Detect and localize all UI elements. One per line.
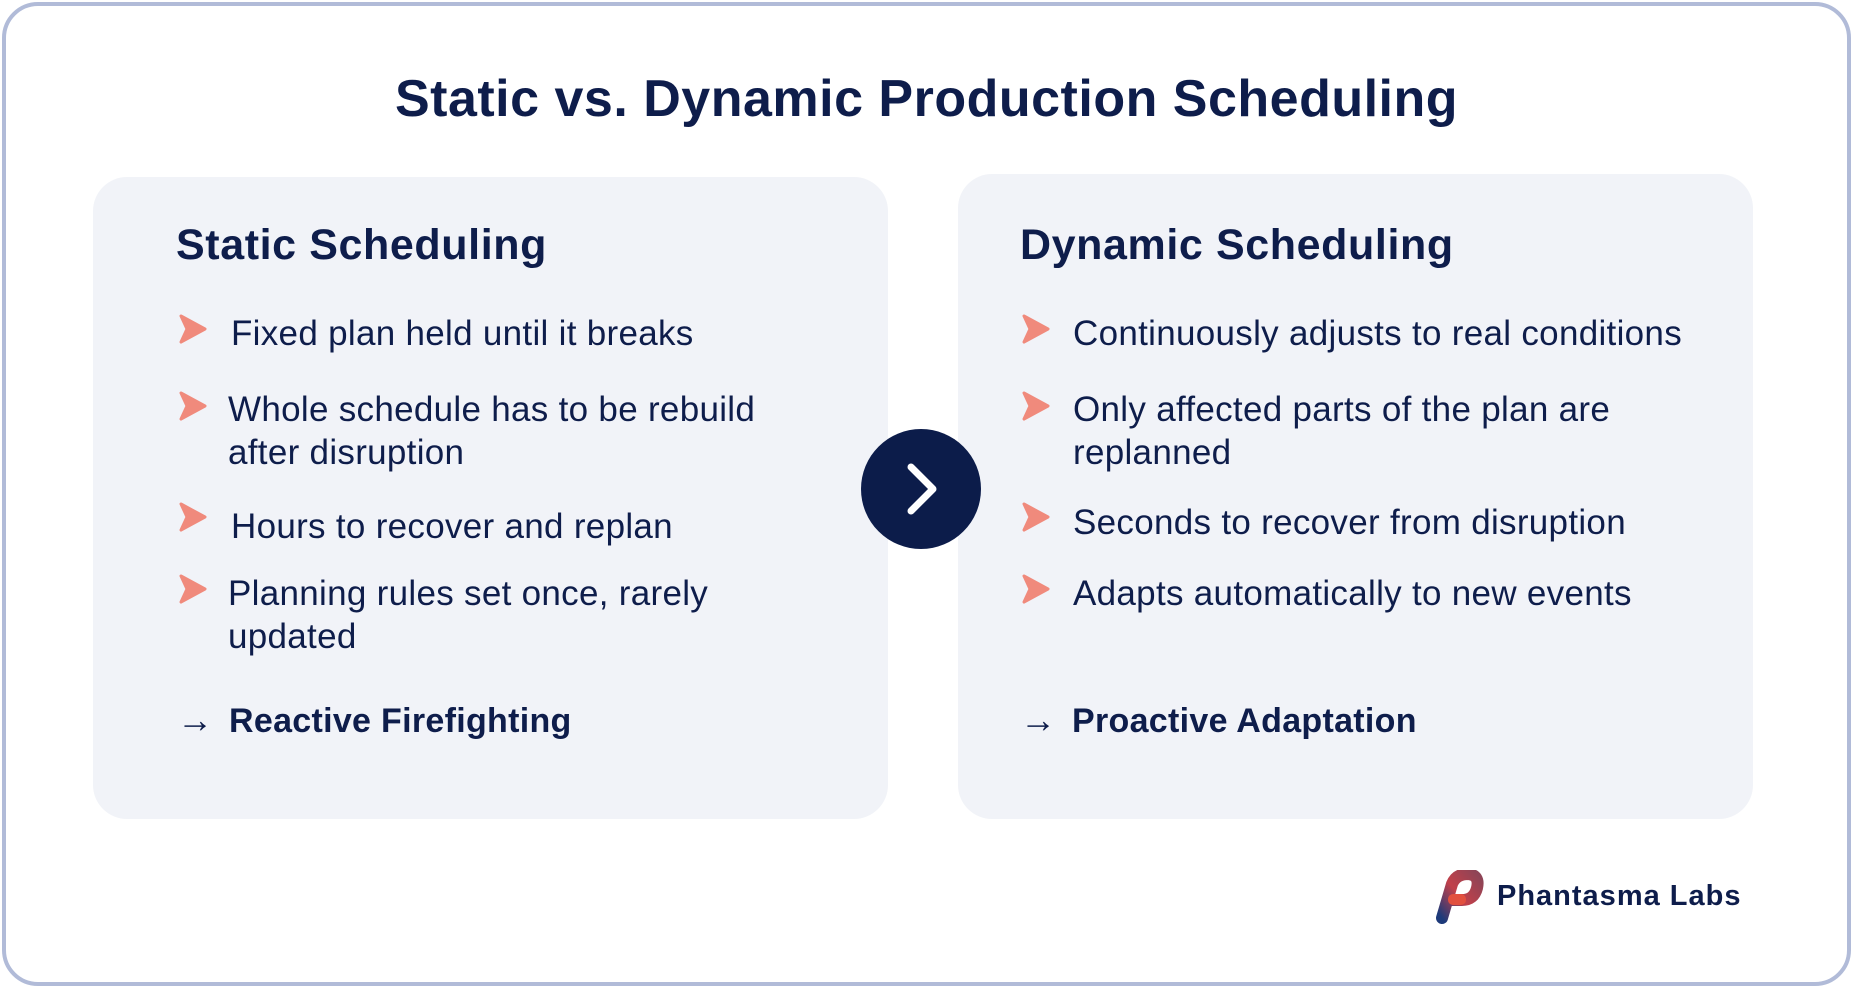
bullet icon 3 <box>180 502 206 532</box>
conclusion: proactive: Proactive Adaptation <box>1072 702 1417 740</box>
bullet icon 1 <box>1022 314 1050 344</box>
item 2: after disruption <box>228 433 464 472</box>
heading: static: Static Scheduling <box>176 221 547 269</box>
item 4 <box>228 574 708 656</box>
item 4: updated <box>228 617 357 656</box>
item 3: Hours to recover and replan <box>231 507 673 546</box>
item 3: Seconds to recover from disruption <box>1073 503 1626 542</box>
item 1: Fixed plan held until it breaks <box>231 314 694 353</box>
bullet icon 1 <box>180 314 206 344</box>
heading: dynamic: Dynamic Scheduling <box>1020 221 1454 269</box>
item 4: Planning rules set once, rarely <box>228 574 708 613</box>
item 2 <box>228 390 755 472</box>
item 1: Continuously adjusts to real conditions <box>1073 314 1682 353</box>
item 2 <box>1073 390 1610 472</box>
item 2: replanned <box>1073 433 1231 472</box>
panel: dynamic scheduling <box>958 174 1753 819</box>
item 4: Adapts automatically to new events <box>1073 574 1632 613</box>
bullet icon 4 <box>1022 574 1050 604</box>
panel: static scheduling <box>93 177 888 819</box>
item 2: Only affected parts of the plan are <box>1073 390 1610 429</box>
bullet icon 3 <box>1022 502 1050 532</box>
icon: center arrow circle <box>861 429 981 549</box>
conclusion: reactive: Reactive Firefighting <box>229 702 572 740</box>
logo: Phantasma Labs <box>1436 870 1741 924</box>
title: Static vs. Dynamic Production Scheduling <box>395 70 1458 128</box>
conclusion: reactive: → <box>177 699 213 740</box>
icon: logo mark <box>1436 870 1484 924</box>
item 2: Whole schedule has to be rebuild <box>228 390 755 429</box>
bullet icon 4 <box>180 574 206 604</box>
bullet icon 2 <box>180 392 206 421</box>
bullet icon 2 <box>1022 392 1050 421</box>
conclusion: proactive: → <box>1020 699 1056 740</box>
logo text: Phantasma Labs <box>1497 880 1741 912</box>
